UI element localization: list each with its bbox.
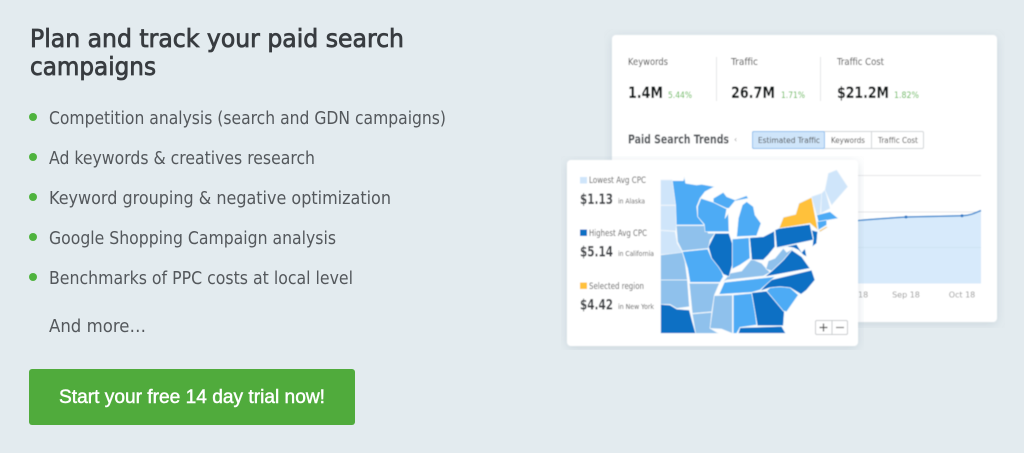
feature list: Benchmarks of PPC costs at local level <box>49 268 353 289</box>
chart tabs: Estimated Traffic <box>758 136 820 145</box>
line chart: Sep 18 <box>892 290 920 300</box>
title: Plan and track your paid search <box>30 24 404 53</box>
chart heading: Paid Search Trends <box>628 132 729 146</box>
stat: keywords: 5.44% <box>668 91 692 101</box>
stat: traffic: Traffic <box>730 57 758 68</box>
stat: traffic cost <box>836 57 919 102</box>
stat: keywords: 1.4M <box>628 83 663 102</box>
stat: traffic: 26.7M <box>731 83 775 102</box>
stat: traffic cost: $21.2M <box>837 83 889 102</box>
line chart: 18 <box>858 290 868 300</box>
legend: selected region <box>580 282 655 314</box>
panel: paid search dashboard: ‹ <box>734 135 737 144</box>
stat: traffic cost: Traffic Cost <box>836 57 884 68</box>
legend: lowest CPC <box>580 176 646 208</box>
stat: keywords: Keywords <box>628 57 668 68</box>
chart tabs: Keywords <box>831 136 865 145</box>
and more text: And more… <box>49 316 146 337</box>
legend: highest CPC <box>580 229 654 260</box>
call to action button: Start your free 14 day trial now! <box>59 386 325 408</box>
feature list <box>29 108 446 289</box>
panel: paid search dashboard <box>612 35 997 322</box>
title <box>30 24 404 81</box>
legend: lowest CPC: Lowest Avg CPC <box>589 176 646 186</box>
legend: selected region: Selected region <box>589 282 644 292</box>
chart tabs: Traffic Cost <box>877 136 918 145</box>
map: eastern US states <box>661 170 848 333</box>
legend: selected region: $4.42 <box>580 298 613 314</box>
feature list: Keyword grouping & negative optimization <box>49 188 391 209</box>
legend: lowest CPC: in Alaska <box>618 198 645 206</box>
chart tabs <box>752 132 924 148</box>
legend: highest CPC: Highest Avg CPC <box>589 229 647 239</box>
legend: highest CPC: $5.14 <box>580 244 613 260</box>
feature list: Ad keywords & creatives research <box>49 148 315 169</box>
panel: CPC map <box>567 160 858 346</box>
stat: keywords <box>628 57 692 102</box>
call to action button <box>29 369 355 425</box>
stat: traffic cost: 1.82% <box>894 91 919 101</box>
title: campaigns <box>30 52 156 81</box>
legend: lowest CPC: $1.13 <box>580 192 613 208</box>
line chart <box>840 176 981 300</box>
stat: traffic: 1.71% <box>781 91 805 101</box>
feature list: Google Shopping Campaign analysis <box>49 228 336 249</box>
feature list: Competition analysis (search and GDN campaigns) <box>49 108 446 129</box>
legend: highest CPC: in California <box>618 250 654 258</box>
stat: traffic <box>730 57 805 102</box>
zoom controls <box>816 320 848 334</box>
legend: selected region: in New York <box>618 303 655 311</box>
line chart: Oct 18 <box>949 290 975 300</box>
